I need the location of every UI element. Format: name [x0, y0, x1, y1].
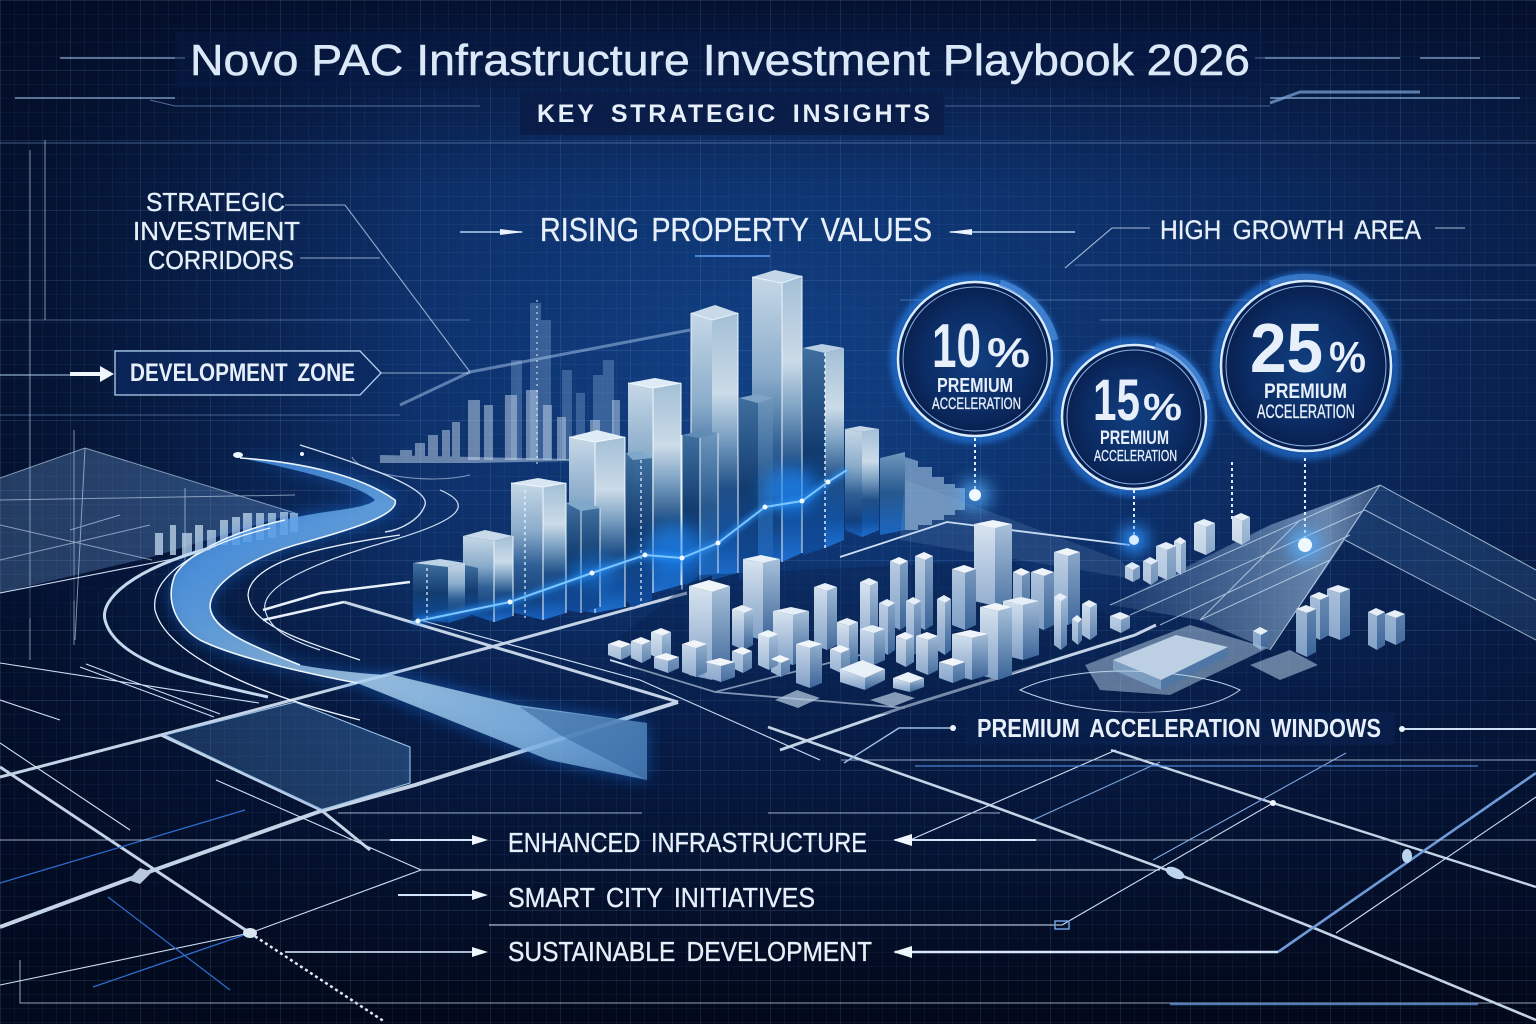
ridge and riverside city blocks — [1125, 513, 1405, 657]
label: premium acceleration windows — [844, 712, 1536, 763]
bar: I — [566, 500, 600, 613]
bar: C — [803, 344, 844, 555]
bar: tallest A — [752, 270, 802, 562]
list: sustainable development — [285, 936, 1278, 967]
label: premium acceleration windows: PREMIUM ACCELERATION WINDOWS — [977, 713, 1381, 743]
subtitle: KEY STRATEGIC INSIGHTS — [537, 100, 930, 128]
callout: 15% premium acceleration — [1059, 342, 1209, 492]
bar: G — [626, 451, 652, 607]
list: smart city initiatives — [398, 882, 815, 913]
bar: far right M — [845, 426, 879, 537]
miniature city blocks — [600, 520, 1135, 725]
callout: 15% premium acceleration: ACCELERATION — [1094, 448, 1177, 465]
bar: J — [511, 478, 566, 620]
callout: 25% premium acceleration: ACCELERATION — [1257, 402, 1355, 423]
label: development zone with arrow — [0, 351, 470, 395]
bar: K — [463, 530, 513, 622]
faded background skyline — [380, 300, 690, 465]
bar: H — [569, 430, 625, 613]
label: rising property values — [460, 211, 1075, 256]
growth trend line — [413, 468, 847, 624]
label: development zone with arrow: DEVELOPMENT ZONE — [130, 359, 355, 387]
road network lines — [0, 522, 1536, 1022]
subtitle — [520, 92, 944, 135]
curved highway — [104, 445, 647, 810]
callout: 10% premium acceleration — [895, 279, 1055, 439]
frame lines — [0, 58, 1536, 660]
list: enhanced infrastructure: ENHANCED INFRASTRUCTURE — [508, 827, 867, 858]
bar: F — [628, 378, 681, 593]
callout: 15% premium acceleration: PREMIUM — [1100, 428, 1169, 449]
descending bars behind chart — [880, 452, 1140, 580]
right mountain wireframe — [1110, 485, 1536, 650]
label: strategic investment corridors — [133, 187, 470, 372]
callout: 10% premium acceleration: ACCELERATION — [932, 394, 1021, 413]
callout: 15% premium acceleration: 15 — [1093, 368, 1140, 433]
bar: L — [413, 559, 478, 623]
callout: 10% premium acceleration: % — [987, 329, 1030, 376]
callout: 25% premium acceleration: % — [1329, 333, 1366, 382]
label: strategic investment corridors: INVESTMENT — [133, 216, 300, 246]
callout: 25% premium acceleration: PREMIUM — [1264, 380, 1347, 403]
left mountain wireframe — [0, 448, 298, 640]
label: strategic investment corridors: STRATEGIC — [146, 187, 285, 217]
list: smart city initiatives: SMART CITY INITIATIVES — [508, 882, 815, 913]
bar: B — [691, 305, 738, 580]
callout: 25% premium acceleration — [1217, 277, 1395, 455]
list: enhanced infrastructure — [390, 827, 1036, 858]
bar: E — [682, 431, 718, 590]
callout connectors with glowing points — [959, 438, 1321, 561]
callout: 10% premium acceleration: 10 — [932, 312, 981, 381]
callout: 10% premium acceleration: PREMIUM — [937, 375, 1013, 397]
3D bar chart: rising property values — [413, 270, 879, 623]
callout: 25% premium acceleration: 25 — [1250, 309, 1323, 387]
flat warehouse — [1020, 625, 1318, 712]
callout: 15% premium acceleration: % — [1143, 387, 1182, 429]
label: high growth area — [1065, 215, 1465, 268]
label: strategic investment corridors: CORRIDORS — [148, 245, 294, 275]
label: rising property values: RISING PROPERTY VALUES — [540, 211, 932, 248]
title: Novo PAC Infrastructure Investment Playbook 2026 — [190, 36, 1250, 85]
bar: D — [739, 394, 773, 580]
list: sustainable development: SUSTAINABLE DEVELOPMENT — [508, 936, 872, 967]
label: high growth area: HIGH GROWTH AREA — [1160, 215, 1421, 245]
